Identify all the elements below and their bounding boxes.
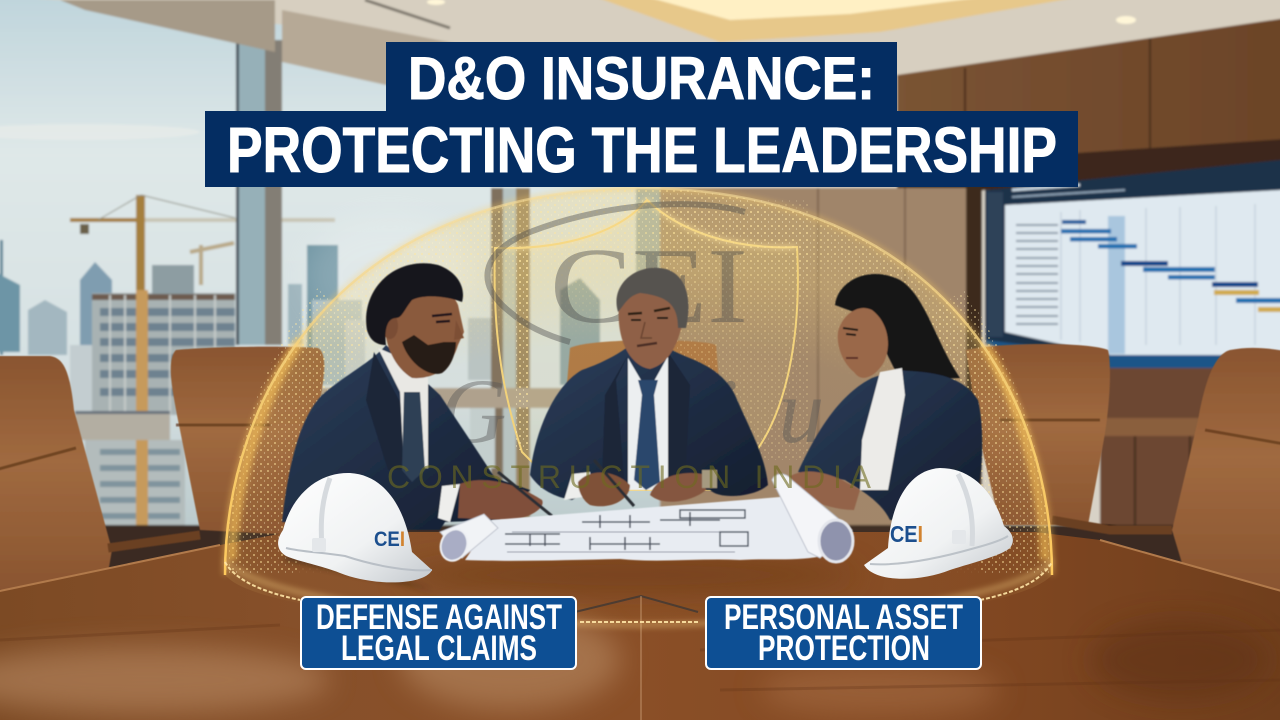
conference table <box>0 532 1280 720</box>
executive right <box>782 274 982 520</box>
callout: asset protection: PROTECTION <box>758 629 930 668</box>
face <box>385 288 464 378</box>
chair left <box>171 347 324 535</box>
leather chairs <box>0 340 1280 590</box>
chair centre <box>566 340 720 395</box>
hard hat right <box>864 468 1013 579</box>
chair right <box>966 344 1110 525</box>
callout: legal defense: DEFENSE AGAINST <box>316 598 562 637</box>
hair <box>835 274 960 380</box>
hair <box>366 263 463 345</box>
hard hat left <box>278 473 432 590</box>
blueprints on table <box>436 474 853 564</box>
chair far left <box>0 356 112 590</box>
face <box>838 308 888 378</box>
callout: asset protection: PERSONAL ASSET <box>724 598 963 637</box>
jacket <box>798 370 982 520</box>
wood wall <box>660 16 1280 545</box>
rolled paper left <box>436 514 498 564</box>
hand <box>782 472 860 510</box>
hard hat right: CEI <box>890 521 923 547</box>
blouse <box>860 368 905 490</box>
hands and pen <box>564 472 595 500</box>
title banner <box>205 42 1078 187</box>
shirt and tie <box>628 356 669 490</box>
face <box>619 287 684 369</box>
hair <box>616 268 688 328</box>
hard hat left: CEI <box>374 528 405 551</box>
ceiling and blinds <box>0 0 1280 108</box>
crane <box>70 195 335 285</box>
window view: skyline and construction site <box>0 0 660 560</box>
watermark logo: CEI <box>550 227 748 346</box>
callout: legal defense: LEGAL CLAIMS <box>341 629 537 668</box>
shield emblem <box>495 200 810 490</box>
title line one: D&O INSURANCE: <box>408 45 875 112</box>
rolled paper right <box>772 474 853 562</box>
executive left <box>282 263 552 530</box>
shirt and tie <box>378 348 428 470</box>
floor shadow behind table <box>0 525 1280 605</box>
title line two: PROTECTING THE LEADERSHIP <box>227 114 1057 186</box>
window frames <box>75 40 662 518</box>
watermark logo: Genius <box>440 360 900 462</box>
jacket <box>282 345 530 530</box>
protective dome <box>225 188 1052 625</box>
chair far right <box>1172 348 1280 590</box>
jacket <box>530 345 768 500</box>
dome base glow <box>225 560 1052 625</box>
watermark logo <box>440 204 900 462</box>
wall screen: project gantt chart <box>985 158 1280 368</box>
callout: legal defense <box>301 597 576 669</box>
callout: asset protection <box>706 597 981 669</box>
executive centre <box>530 268 768 506</box>
hand and pen <box>438 484 460 522</box>
watermark: company name: CONSTRUCTION INDIA <box>387 459 872 495</box>
